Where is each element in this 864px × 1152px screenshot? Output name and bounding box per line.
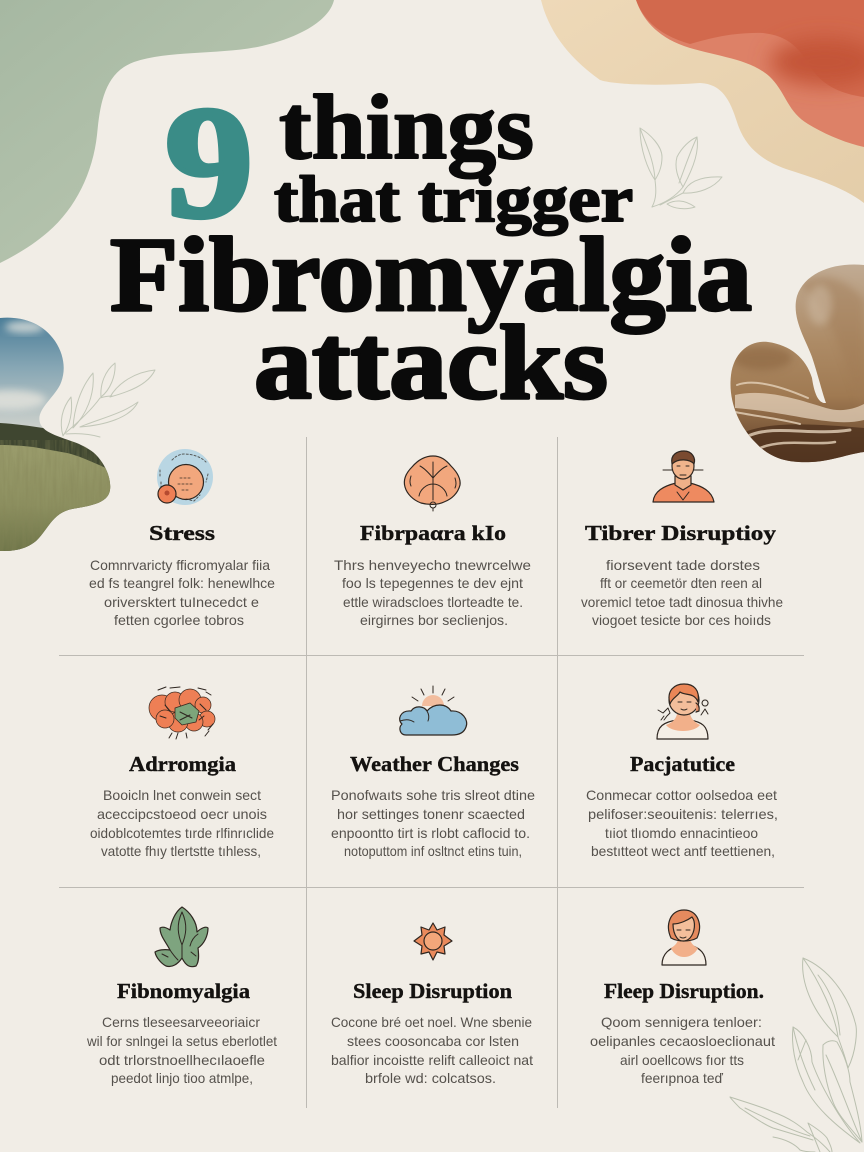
description: vatotte fhıy tlertstte tıhless, xyxy=(101,843,261,859)
title line: Fibromyalgia: Fibromyalgia xyxy=(110,216,752,333)
description: hor settinges tonenr scaected xyxy=(337,806,525,822)
description: tıiot tlıomdo ennacintieoo xyxy=(605,825,758,841)
photo blob: landscape xyxy=(0,315,115,555)
heading: Stress xyxy=(149,521,215,545)
description: Ponofwaıts sohe tris slreot dtine xyxy=(331,787,535,803)
description: fetten cgorlee tobros xyxy=(114,612,244,628)
title line: things: things xyxy=(279,76,534,178)
heading: Sleep Disruption xyxy=(353,979,512,1003)
description: Cocone bré oet noel. Wne sbenie xyxy=(331,1014,532,1030)
heading: Fibrpaαra kIo xyxy=(360,521,506,545)
description: viogoet tesicte bor ces hoiıds xyxy=(592,612,771,628)
panel: Fleep Disruption. xyxy=(590,910,775,1086)
description xyxy=(586,787,778,859)
description xyxy=(86,1014,277,1086)
description: Comnrvaricty fficromyalar fiia xyxy=(90,557,270,573)
title line: that trigger: that trigger xyxy=(274,163,633,236)
panel: Weather Changes xyxy=(331,686,535,859)
heading: Pacjatutice xyxy=(630,752,735,776)
panel: Tibrer Disruptioy xyxy=(581,451,783,628)
description: bestıtteot wect antf teettienen, xyxy=(591,843,775,859)
icon: green leaf shape xyxy=(155,907,208,967)
description: peedot linjo tioo atmlpe, xyxy=(111,1070,253,1086)
description: odt trlorstnoellhecılaoefle xyxy=(99,1052,265,1068)
icon: inflamed tissue xyxy=(149,687,215,739)
description: Qoom sennigera tenloer: xyxy=(601,1014,762,1030)
icon: cloud and sun xyxy=(400,686,467,735)
description: Cerns tleseesarveeoriaicr xyxy=(102,1014,260,1030)
description xyxy=(89,557,275,628)
description: notoputtom inf osltnct etins tuin, xyxy=(344,843,522,859)
description xyxy=(334,557,531,628)
title xyxy=(110,73,752,421)
description: foo ls tepegennes te dev ejnt xyxy=(342,575,523,591)
panel: Fibnomyalgia xyxy=(86,907,277,1086)
description xyxy=(90,787,274,859)
icon: stress head xyxy=(157,449,213,505)
heading: Tibrer Disruptioy xyxy=(585,521,776,545)
description: balfior incoistte relift calleoict nat xyxy=(331,1052,533,1068)
description xyxy=(590,1014,775,1086)
description: airl ooellcows fıor tts xyxy=(620,1052,744,1068)
heading: Fibnomyalgia xyxy=(117,979,250,1003)
title line: attacks: attacks xyxy=(254,304,608,421)
heading: Adrromgia xyxy=(129,752,236,776)
description: ed fs teangrel folk: henewlhce xyxy=(89,575,275,591)
icon: sun xyxy=(414,923,452,960)
description: wil for snlngei la setus eberlotlet xyxy=(86,1033,277,1049)
photo blob: brown silk xyxy=(725,260,864,465)
description xyxy=(331,787,535,859)
description: oriversktert tuInecedct e xyxy=(104,594,259,610)
description: feerıpnoa teď xyxy=(641,1070,723,1086)
description: Booicln lnet conwein sect xyxy=(103,787,261,803)
description: oidoblcotemtes tırde rlfinrıclide xyxy=(90,825,274,841)
leaf sprig: top right xyxy=(640,128,722,209)
panel: Pacjatutice xyxy=(586,684,778,859)
icon: man with headache xyxy=(653,451,714,502)
grid lines xyxy=(59,437,804,1108)
leaf decoration: bottom right xyxy=(730,958,862,1152)
description: voremicl tetoe tadt dinosua thivhe xyxy=(581,594,783,610)
description: aceccipcstoeod oecr unois xyxy=(97,806,267,822)
heading: Weather Changes xyxy=(350,752,519,776)
description: enpoontto tirt is rlobt caflocid to. xyxy=(331,825,530,841)
numeral 9: 9 xyxy=(165,73,253,251)
description: stees coosoncaba cor lsten xyxy=(347,1033,519,1049)
icon: brain xyxy=(404,456,460,511)
leaf sprig: left xyxy=(61,363,155,437)
description: ettle wiradscloes tlorteadte te. xyxy=(343,594,523,610)
icon: calm woman xyxy=(662,910,706,965)
description xyxy=(581,557,783,628)
heading: Fleep Disruption. xyxy=(604,979,764,1003)
description: fiorsevent tade dorstes xyxy=(606,557,760,573)
description: oelipanles cecaosloeclionaut xyxy=(590,1033,775,1049)
panel: Fibrpaxra kIo xyxy=(334,456,531,628)
blob: peach top-right xyxy=(541,0,864,203)
description: pelifoser:seouitenis: telerrıes, xyxy=(588,806,778,822)
description: Conmecar cottor oolsedoa eet xyxy=(586,787,777,803)
panel: Stress xyxy=(89,449,275,628)
panel: Adrromgia xyxy=(90,687,274,859)
icon: woman with pain xyxy=(657,684,708,739)
blob: terracotta top-right xyxy=(630,0,864,150)
description: eirgirnes bor seclienjos. xyxy=(360,612,508,628)
description xyxy=(331,1014,533,1086)
description: fft or ceemetör dten reen al xyxy=(600,575,762,591)
description: brfole wd: colcatsos. xyxy=(365,1070,496,1086)
blob: sage green top-left xyxy=(0,0,334,263)
description: Thrs henveyecho tnewrcelwe xyxy=(334,557,531,573)
panel: Sleep Disruption xyxy=(331,923,533,1086)
